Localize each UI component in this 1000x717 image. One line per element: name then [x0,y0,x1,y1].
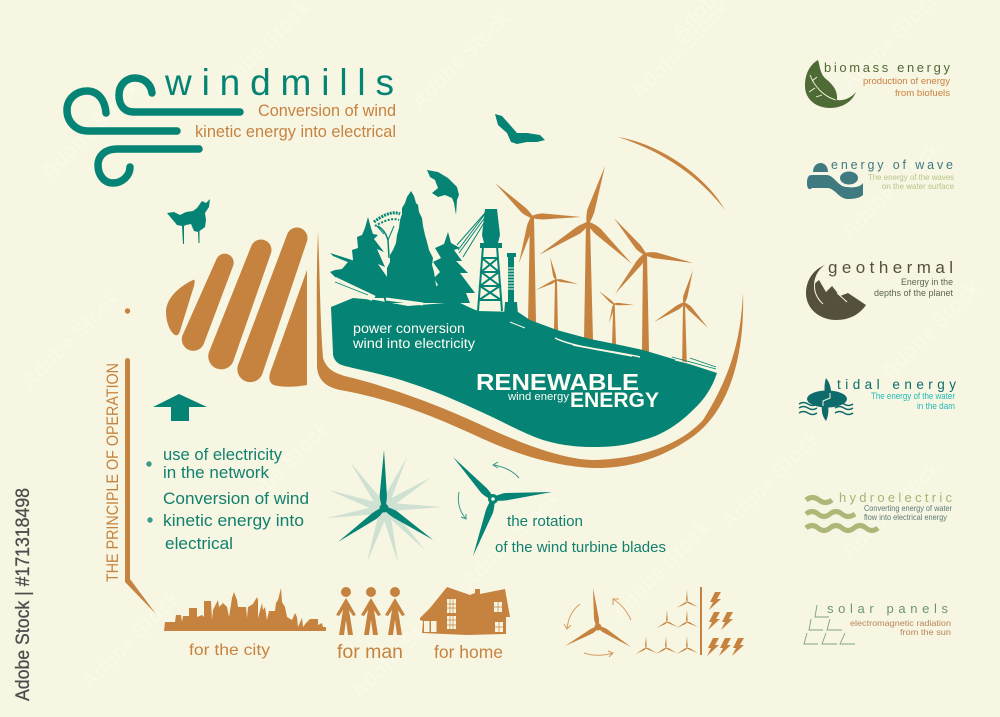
wind turbines on hill [493,165,710,370]
icon: water waves [806,498,878,530]
turbine 5 [535,257,578,330]
panel: geothermal [806,258,953,320]
turbine 6 [598,290,634,346]
icon: wind gusts [67,78,240,183]
turbine 2 [537,165,635,340]
subtitle: kinetic energy into electrical [195,122,396,141]
text: power conversion [352,321,475,351]
panel: tidal energy: in the dam [917,401,955,411]
text: power conversion: power conversion [353,321,465,336]
small leafy tree [374,213,400,258]
turbine 4 [653,270,710,370]
panel: biomass energy [805,60,950,108]
list: use of electricity [146,446,309,553]
panel: geothermal: geothermal [828,258,953,277]
infographic canvas: Adobe Stock [837,456,945,564]
icon: spinning turbine with pale blades [326,450,442,564]
icon: three people [336,587,405,635]
hill and landscape silhouette [330,191,717,447]
icon: small bird [167,199,210,244]
icon: wave [807,163,863,199]
panel: biomass energy: from biofuels [895,88,950,99]
text: for home: for home [434,642,503,662]
list: use of electricity: electrical [165,535,233,553]
panel: solar panels: solar panels [827,601,948,616]
chimney [504,253,518,315]
infographic canvas: Adobe Stock [877,276,985,384]
text: the rotation: the rotation [507,513,583,530]
text: the rotation [495,513,666,556]
panel: solar panels [804,601,951,644]
brush strokes [330,253,352,263]
list: use of electricity: Conversion of wind [163,490,309,508]
panel: energy of wave [807,158,954,199]
text: renewable energy: ENERGY [570,389,659,412]
list: use of electricity: use of electricity [163,446,283,464]
panel: hydroelectric [806,490,952,530]
icon: flying bird middle [427,170,459,215]
panel: hydroelectric: flow into electrical energy [864,512,948,522]
bulb upper arc [618,137,725,210]
text: renewable energy [476,369,659,412]
infographic canvas: Adobe Stock [227,416,335,524]
panel: solar panels: electromagnetic radiation [850,618,951,628]
icon: flying bird top [495,114,545,144]
list: use of electricity: in the network [163,464,270,482]
oil derrick [457,209,502,311]
subtitle: Conversion of wind [258,101,396,120]
panel: energy of wave: on the water surface [882,181,954,191]
icon: leaf [805,60,856,108]
icon: orange turbine with arrows [564,588,633,657]
panel: energy of wave: energy of wave [831,158,953,172]
text: for the city: for the city [189,642,270,659]
panel: geothermal: Energy in the [901,277,953,288]
infographic canvas: Adobe Stock [607,516,715,624]
infographic canvas: Adobe Stock [407,6,515,114]
infographic canvas: Adobe Stock [457,486,565,594]
panel: tidal energy: The energy of the water [871,391,955,401]
icon: wind farm to lightning [635,587,744,656]
text: the rotation: of the wind turbine blades [495,539,666,556]
infographic canvas: Adobe Stock [717,426,825,534]
turbine 3 [611,216,694,352]
light bulb stripes [166,228,307,387]
icon: up arrow [153,394,207,421]
text: renewable energy: wind energy [507,391,569,403]
title: windmills [164,62,394,103]
panel: solar panels: from the sun [900,627,951,637]
infographic canvas: Adobe Stock [77,586,185,694]
text: renewable energy: RENEWABLE [476,369,639,395]
icon: rotating turbine with arrows [450,455,552,558]
infographic canvas: Adobe Stock [837,136,945,244]
icon: tidal turbine [799,378,853,421]
icon: solar grid [804,605,855,644]
subtitle [195,101,396,141]
infographic canvas: Adobe Stock [197,226,305,334]
infographic canvas: Adobe Stock [347,596,455,704]
panel: tidal energy [799,377,956,421]
text: power conversion: wind into electricity [352,336,475,351]
panel: energy of wave: The energy of the waves [868,172,954,182]
infographic canvas: Adobe Stock [17,286,125,394]
trees [382,191,440,303]
icon: city skyline [164,588,326,631]
panel: biomass energy: biomass energy [824,60,950,75]
icon: house [420,587,510,635]
panel: hydroelectric: Converting energy of water [864,503,952,513]
turbine 1 [493,181,581,322]
list: use of electricity: kinetic energy into [163,512,304,530]
icon: mountain crescent [806,265,866,320]
sidebar: the principle of operation [104,308,156,614]
stock credit: Adobe Stock | #171318498 [13,488,34,701]
sidebar: the principle of operation: THE PRINCIPLE OF OPERATION [104,363,122,582]
panel: biomass energy: production of energy [863,76,950,87]
infographic canvas: Adobe Stock [37,76,145,184]
panel: geothermal: depths of the planet [874,288,953,299]
text: for man: for man [337,642,403,663]
bulb outline [317,232,743,468]
panel: tidal energy: tidal energy [837,377,956,392]
panel: hydroelectric: hydroelectric [839,490,952,505]
